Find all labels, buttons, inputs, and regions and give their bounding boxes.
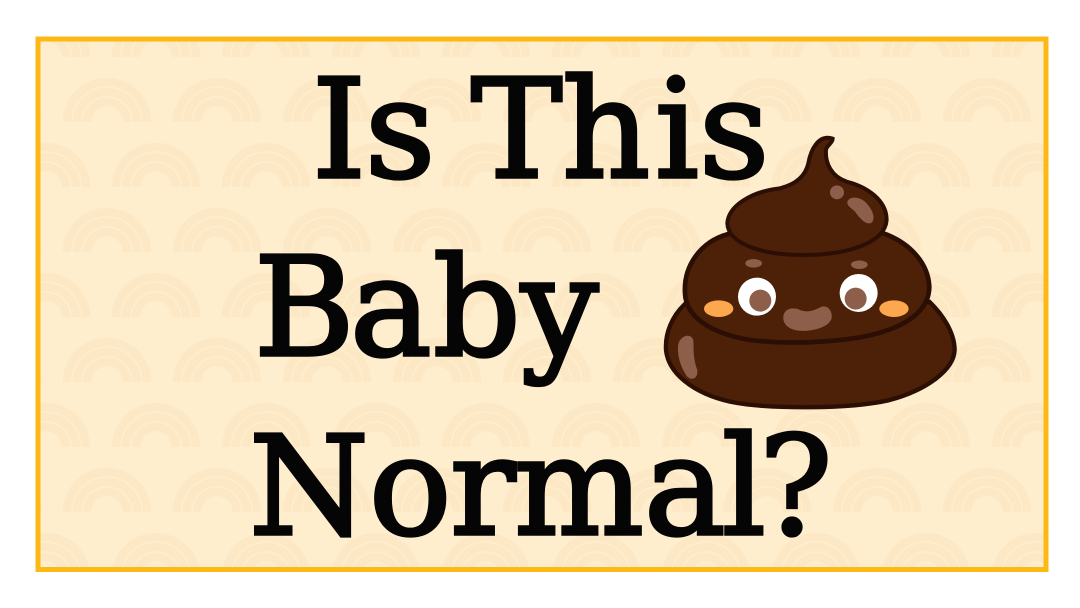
title [249,51,832,567]
icon: smiling poop [666,138,955,407]
middle layer [685,233,929,342]
eyes [738,274,878,316]
top layer [727,138,887,255]
cheeks [704,300,909,317]
title: Is This [312,51,769,210]
highlights [678,185,874,379]
mouth [783,306,832,331]
title: Baby [254,229,598,388]
title: Normal? [249,408,832,567]
bottom layer [666,302,955,407]
